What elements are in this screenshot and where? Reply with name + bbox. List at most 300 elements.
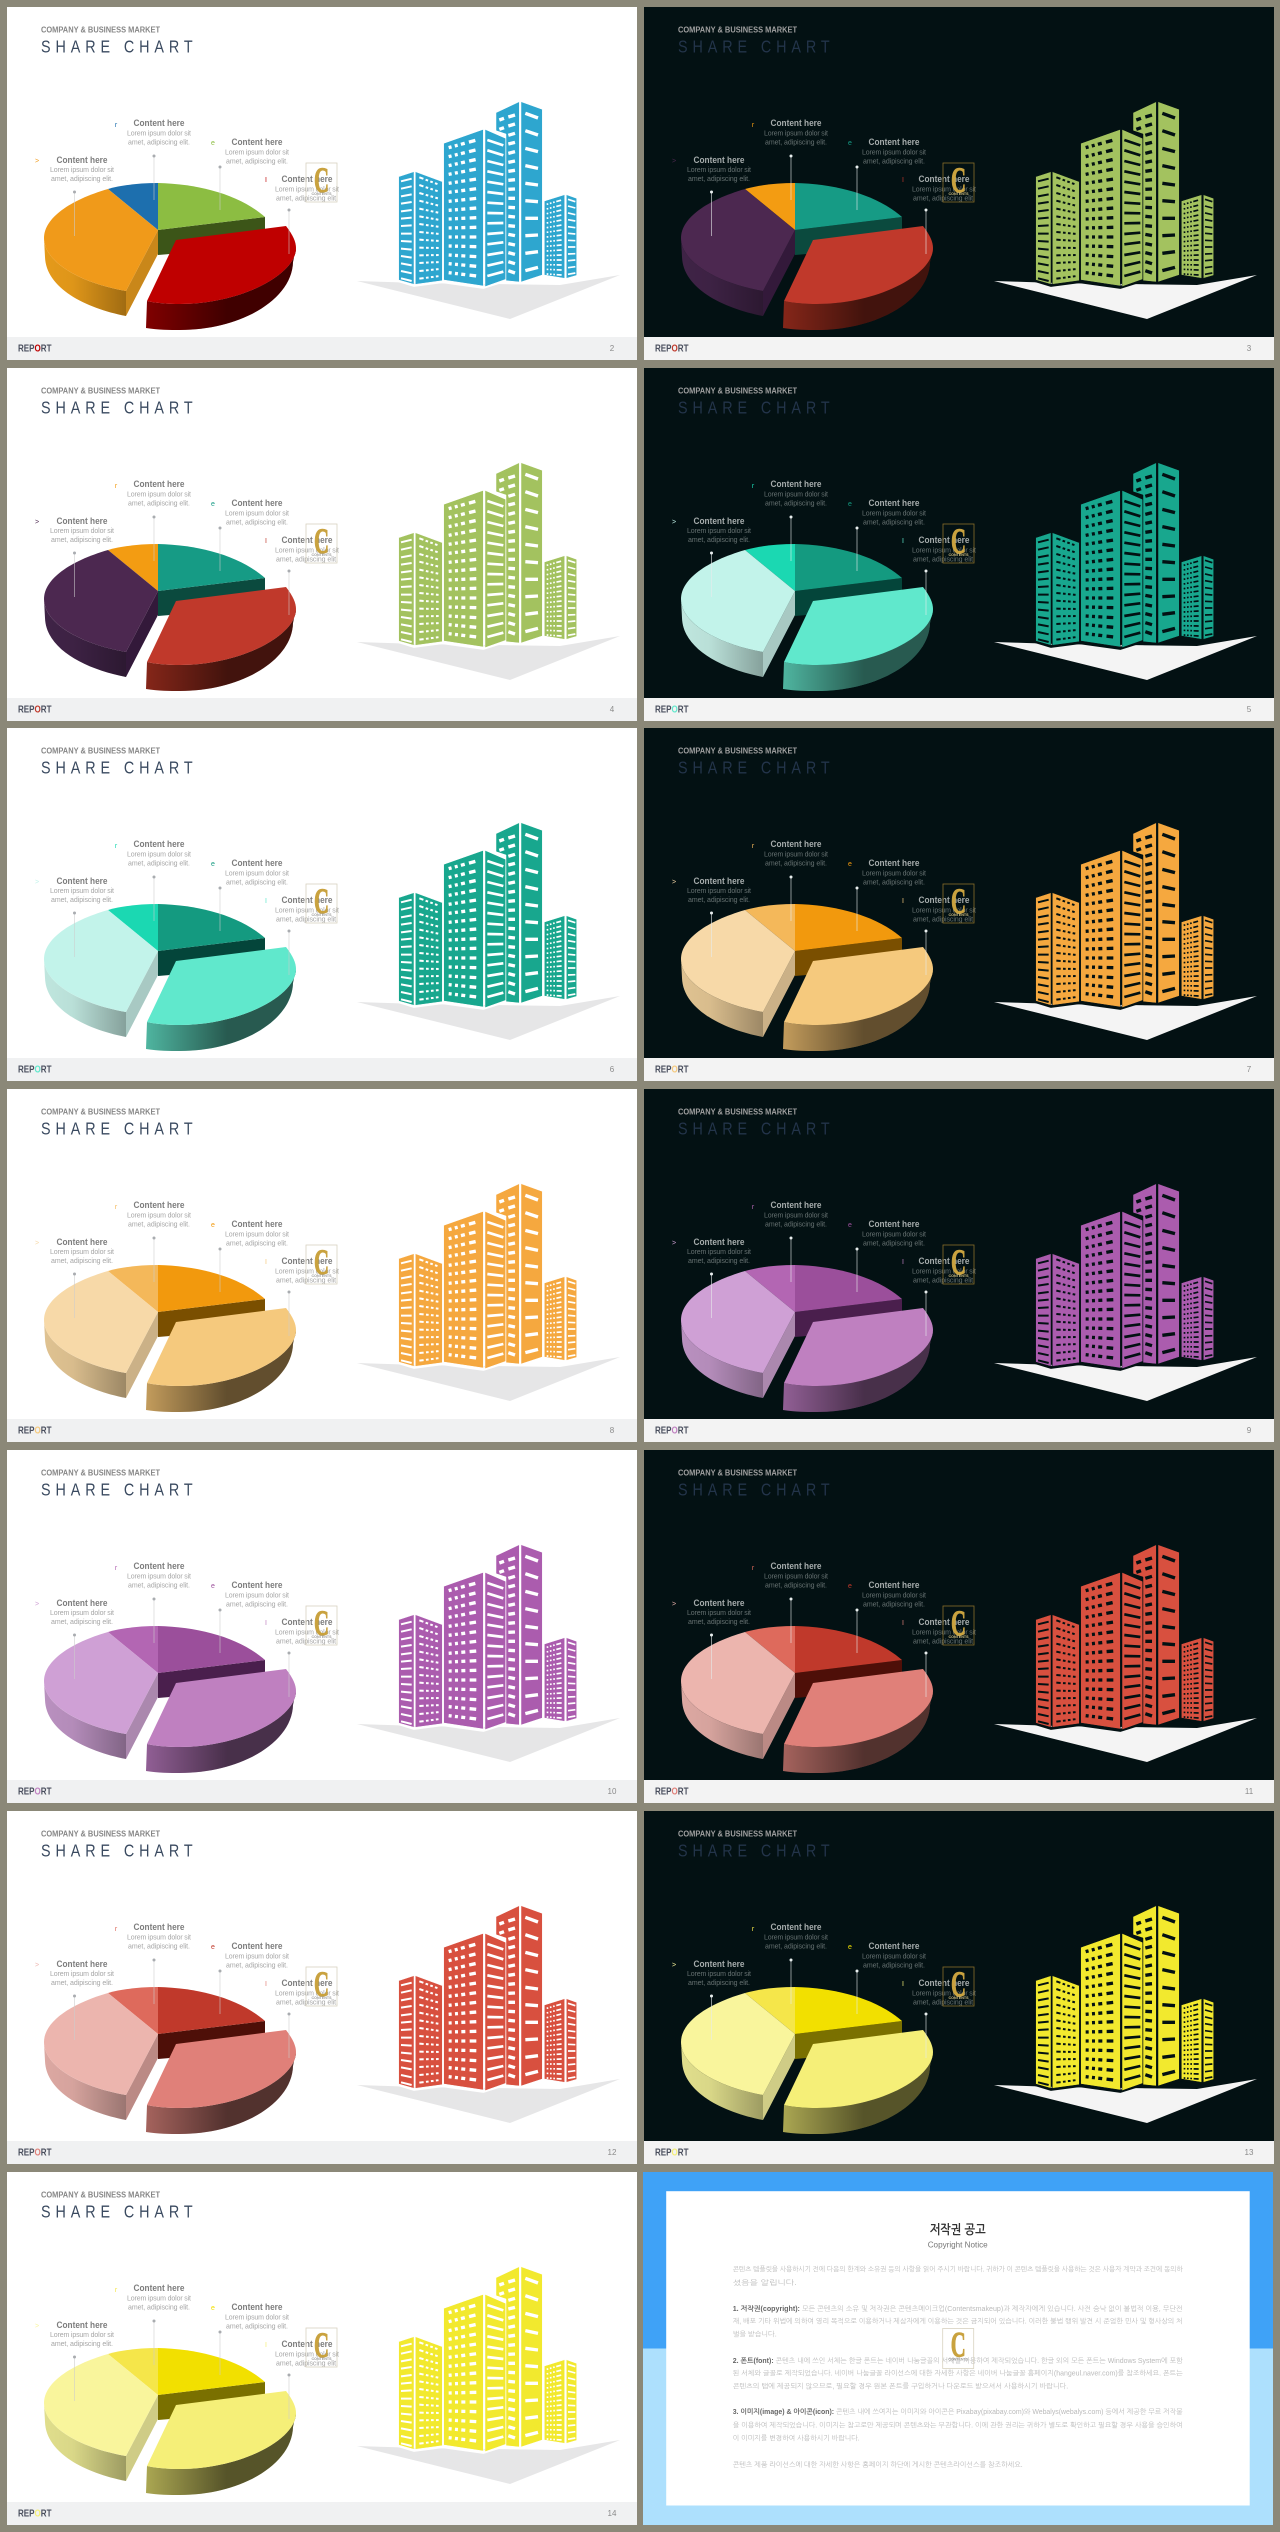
label: upper right: Lorem ipsum dolor sit [862,1232,926,1239]
label: left: Content here [693,876,744,887]
label: upper right: Content here [232,1941,282,1952]
label: upper right [848,1941,926,1969]
label: upper right [211,1941,289,1969]
label: right [265,174,339,202]
label: upper right: amet, adipiscing elit. [226,2323,288,2330]
label: upper right: Content here [868,1941,919,1952]
3D pie chart [44,904,296,1051]
watermark [306,1964,337,2006]
footer: REPORT [655,2147,688,2158]
label: upper right: Content here [232,2302,282,2312]
label: upper right: e [848,861,852,868]
label: left: Lorem ipsum dolor sit [50,1249,114,1256]
footer: 4 [610,705,615,714]
label: right: Content here [282,1256,332,1267]
label: left: amet, adipiscing elit. [51,897,113,904]
building shadow [994,2079,1257,2123]
watermark [306,2324,337,2366]
label: left: amet, adipiscing elit. [51,1258,113,1265]
label: upper right: e [211,861,215,868]
label: right: amet, adipiscing elit. [276,1999,338,2006]
label: left: Lorem ipsum dolor sit [50,167,114,174]
watermark: C [951,881,966,921]
heading: COMPANY & BUSINESS MARKET [678,386,797,395]
label: upper right: amet, adipiscing elit. [226,519,288,526]
footer: REPORT [655,1426,688,1437]
footer [7,2141,637,2164]
label: top: r [115,2286,118,2294]
label: left [672,1959,751,1987]
label: right [265,1256,339,1285]
label: top: amet, adipiscing elit. [128,1582,190,1589]
heading [41,386,193,418]
label: right: Content here [918,1256,969,1267]
label: upper right [848,858,926,887]
label: left: Content here [693,1237,744,1248]
label: left: amet, adipiscing elit. [688,176,750,183]
label: right: amet, adipiscing elit. [276,1278,338,1285]
label: right: Content here [282,1617,332,1628]
footer [644,1780,1274,1803]
label: upper right: Lorem ipsum dolor sit [225,1592,289,1599]
leader lines [73,154,290,254]
3D pie chart [681,1626,933,1773]
label: top: Content here [134,118,184,129]
footer: 6 [610,1065,615,1074]
notice body text [733,2265,1183,2468]
heading: SHARE CHART [678,1121,830,1139]
label: upper right: amet, adipiscing elit. [226,1962,288,1969]
label: right: Lorem ipsum dolor sit [912,1269,976,1276]
footer: 2 [610,344,615,353]
panel: slide 3 [644,7,1274,360]
label: left: Lorem ipsum dolor sit [687,1971,751,1978]
label: right: Content here [282,535,332,546]
label: right: Content here [282,174,332,185]
label: right: amet, adipiscing elit. [276,1638,338,1645]
label: top: Content here [134,2282,184,2294]
label: right: Content here [918,1617,969,1628]
label: right: amet, adipiscing elit. [913,1999,975,2006]
watermark: CONTENTS [312,552,332,557]
building shadow [357,2440,620,2484]
icon: city buildings [399,1545,577,1730]
footer: REPORT [655,704,688,715]
footer: REPORT [18,704,52,715]
label: left [35,1598,114,1626]
label: right: Lorem ipsum dolor sit [275,547,339,554]
label: right: amet, adipiscing elit. [913,1278,975,1285]
3D pie chart [681,544,933,691]
label: upper right: Content here [232,858,282,869]
label: right: amet, adipiscing elit. [276,2360,338,2367]
building shadow [357,1718,620,1762]
footer: 14 [608,2508,617,2518]
label: top [752,1561,828,1589]
label: top: Content here [770,118,821,129]
label: right [902,1256,976,1285]
leader lines [710,515,927,615]
label: upper right: amet, adipiscing elit. [863,1601,925,1608]
watermark: C [314,2324,329,2364]
label: top: Lorem ipsum dolor sit [127,1573,191,1580]
label: top: amet, adipiscing elit. [765,140,827,146]
label: right: Lorem ipsum dolor sit [275,2351,339,2358]
3D pie chart [681,1987,933,2134]
label: top: r [752,1565,755,1572]
label: upper right: amet, adipiscing elit. [863,1962,925,1969]
label: top: amet, adipiscing elit. [128,861,190,868]
label: right: amet, adipiscing elit. [913,1638,975,1645]
watermark: C [951,1964,966,2004]
label: top: Lorem ipsum dolor sit [764,130,828,138]
notice body text: 2. 폰트(font): 콘텐츠 내에 쓰인 서체는 한글 폰트는 네이버 나눔글꼴의 서체를 사용하여 제작되었습니다. 한글 외의 모든 폰트는 Windows System에 포함 [733,2356,1183,2364]
footer [644,2141,1274,2164]
label: right: I [902,1981,904,1988]
icon: city buildings [399,1905,577,2091]
heading: SHARE CHART [41,399,193,418]
label: right: amet, adipiscing elit. [276,196,338,202]
label: top: r [752,122,755,129]
watermark: CONTENTS [312,1634,332,1639]
label: right [902,895,976,924]
label: upper right [211,2302,289,2330]
label: upper right: Lorem ipsum dolor sit [225,150,289,156]
label: upper right: e [848,501,852,508]
label: left: Content here [56,1237,108,1248]
label: upper right: e [211,1944,215,1951]
building shadow [994,996,1257,1040]
label: right: Content here [918,174,969,185]
heading [678,1468,830,1500]
label: right: Lorem ipsum dolor sit [275,1629,339,1636]
heading [41,1829,193,1861]
label: upper right: e [211,1583,215,1590]
label: upper right: e [848,1583,852,1590]
label: upper right [211,1219,289,1248]
label: top: amet, adipiscing elit. [128,500,190,507]
notice body text: 된 서체와 글꼴로 제작되었습니다. 네이버 나눔글꼴 라이선스에 대한 자세한 사항은 네이버 나눔글꼴 홈페이지(hangeul.naver.com)를 참조하세요. 폰트는 [733,2369,1183,2377]
footer [7,1419,637,1442]
label: left: Content here [56,2320,108,2330]
label: left: Content here [693,1959,744,1970]
label: top: r [752,843,755,850]
label: top: Lorem ipsum dolor sit [127,852,191,859]
leader lines [710,154,927,254]
footer [644,1058,1274,1081]
label: top [752,839,828,868]
notice title: Copyright Notice [928,2239,988,2249]
label: left [35,1959,114,1987]
watermark [943,1242,974,1284]
footer: REPORT [18,1065,52,1076]
label: right [265,2338,339,2367]
building shadow [994,636,1257,680]
watermark: CONTENTS [312,1995,332,2000]
heading [41,1468,193,1500]
label: top: Content here [134,1561,184,1572]
label: left [35,516,114,544]
footer: 7 [1246,1065,1251,1074]
label: left: > [672,1240,676,1247]
heading [678,1108,830,1139]
label: left: Lorem ipsum dolor sit [687,1610,751,1617]
watermark: C [314,881,329,921]
heading: SHARE CHART [41,1121,193,1139]
watermark [306,1603,337,1645]
footer: REPORT [18,344,52,355]
label: upper right: Lorem ipsum dolor sit [225,510,289,517]
label: top [752,479,828,507]
label: top: amet, adipiscing elit. [765,861,827,868]
building shadow [357,2079,620,2123]
label: right: amet, adipiscing elit. [276,917,338,924]
label: left: Content here [56,516,108,527]
label: right: Content here [918,535,969,546]
label: upper right: e [211,140,215,147]
label: right [902,535,976,563]
label: right: Content here [918,895,969,906]
notice body text: 콘텐츠의 탭에 제공되지 않으므로, 필요할 경우 원본 폰트를 구입하거나 다운로드 받으셔서 사용하시기 바랍니다. [733,2382,1069,2390]
label: right: Lorem ipsum dolor sit [275,186,339,194]
label: left: Lorem ipsum dolor sit [50,888,114,895]
notice title: 저작권 공고 [930,2222,986,2236]
watermark [943,1603,974,1645]
heading [41,747,193,778]
label: top: amet, adipiscing elit. [765,1943,827,1950]
label: upper right: e [848,1944,852,1951]
label: upper right: e [211,2304,215,2312]
label: upper right: Lorem ipsum dolor sit [225,1232,289,1239]
footer: 9 [1246,1426,1251,1435]
label: top: r [115,843,118,850]
label: upper right [211,498,289,526]
label: left: amet, adipiscing elit. [51,1980,113,1987]
panel: slide 11 [644,1450,1274,1803]
label: left: Lorem ipsum dolor sit [50,1971,114,1978]
label: top: Lorem ipsum dolor sit [127,130,191,138]
footer [644,1419,1274,1442]
label: top: Lorem ipsum dolor sit [764,1934,828,1941]
label: right: Lorem ipsum dolor sit [912,908,976,915]
label: upper right: Lorem ipsum dolor sit [862,150,926,156]
label: upper right: Content here [868,1219,919,1230]
label: left [35,876,114,904]
label: left [35,1237,114,1265]
label: top: Content here [770,1922,821,1933]
label: right: Content here [282,1978,332,1989]
label: left: Content here [56,876,108,887]
label: right: Content here [918,1978,969,1989]
heading: SHARE CHART [678,1481,830,1500]
label: upper right: Lorem ipsum dolor sit [862,1953,926,1960]
heading: COMPANY & BUSINESS MARKET [41,1108,160,1117]
label: right: Lorem ipsum dolor sit [275,1990,339,1997]
label: left: Lorem ipsum dolor sit [687,888,751,895]
notice body text: 콘텐츠 제품 라이선스에 대한 자세한 사항은 홈페이지 하단에 게시한 콘텐츠라이선스를 참조하세요. [733,2460,1023,2468]
label: right: I [265,538,267,545]
footer [644,698,1274,721]
label: left: amet, adipiscing elit. [688,1619,750,1626]
label: top: r [752,1926,755,1933]
icon: city buildings [1035,1905,1213,2091]
label: right [265,1978,339,2006]
label: upper right [848,498,926,526]
label: left: Lorem ipsum dolor sit [687,167,751,174]
icon: city buildings [399,1184,577,1369]
label: left: > [35,1962,39,1969]
watermark: CONTENTS [312,191,332,196]
label: right: amet, adipiscing elit. [913,196,975,202]
leader lines [710,1597,927,1697]
label: left: Content here [56,1598,108,1609]
footer: 13 [1244,2148,1254,2157]
panel: slide 5 [644,368,1274,721]
label: top: Lorem ipsum dolor sit [127,491,191,498]
label: right: I [265,177,267,184]
label: upper right: Content here [232,1219,282,1230]
watermark: C [314,1242,329,1282]
watermark: C [951,1242,966,1282]
footer: REPORT [655,344,688,355]
notice body text: 3. 이미지(image) & 아이콘(icon): 콘텐츠 내에 쓰여지는 이미지와 아이콘은 Pixabay(pixabay.com)와 Webalys(webalys.com) 등에서 제공한 무료 저작물 [733,2408,1183,2416]
leader lines [710,876,927,975]
label: right: Lorem ipsum dolor sit [275,1269,339,1276]
label: right: I [902,538,904,545]
notice body text: 셨음을 알립니다. [733,2278,797,2286]
label: top [752,1200,828,1229]
label: left [35,2320,114,2348]
3D pie chart [681,183,933,330]
label: left: > [35,519,39,526]
leader lines [73,876,290,975]
heading [41,26,193,57]
label: left: Lorem ipsum dolor sit [50,2332,114,2338]
icon: city buildings [399,2266,577,2452]
heading: SHARE CHART [678,38,830,57]
heading [678,386,830,418]
label: upper right: amet, adipiscing elit. [226,1601,288,1608]
heading: SHARE CHART [41,2203,193,2222]
heading: COMPANY & BUSINESS MARKET [41,2190,160,2199]
label: left: > [35,1601,39,1608]
leader lines [73,1958,290,2058]
panel: copyright notice [643,2172,1273,2525]
label: left: Lorem ipsum dolor sit [50,528,114,535]
panel: slide 4 [7,368,637,721]
panel: slide 8 [7,1089,637,1442]
footer: REPORT [655,1787,688,1798]
footer: REPORT [18,2147,52,2158]
label: left: amet, adipiscing elit. [51,176,113,183]
label: left [672,876,751,904]
label: left: amet, adipiscing elit. [51,537,113,544]
watermark [306,1242,337,1284]
3D pie chart [44,1265,296,1412]
label: top: Lorem ipsum dolor sit [127,2295,191,2302]
panel: slide 12 [7,1811,637,2164]
label: top [115,839,191,868]
label: left: Content here [693,516,744,527]
label: top [115,2282,191,2311]
leader lines [73,1597,290,1697]
label: left: > [672,158,676,165]
label: upper right: e [848,140,852,147]
label: left: amet, adipiscing elit. [688,1980,750,1987]
building shadow [994,1357,1257,1401]
label: right: I [902,1259,904,1266]
label: right: amet, adipiscing elit. [913,556,975,563]
heading: COMPANY & BUSINESS MARKET [41,386,160,395]
label: upper right: Lorem ipsum dolor sit [225,1953,289,1960]
watermark: CONTENTS [948,552,968,557]
label: upper right: Content here [868,498,919,509]
notice body text: 1. 저작권(copyright): 모든 콘텐츠의 소유 및 저작권은 콘텐츠메이크업(Contentsmakeup)과 제작자에게 있습니다. 사전 승낙 없이 불법적 이용, 무단전 [733,2303,1183,2312]
label: upper right: amet, adipiscing elit. [226,158,288,166]
footer: 3 [1246,344,1251,353]
label: left: amet, adipiscing elit. [688,897,750,904]
label: top: Lorem ipsum dolor sit [764,1573,828,1580]
label: top: Content here [770,839,821,850]
icon: city buildings [1035,102,1213,287]
heading: COMPANY & BUSINESS MARKET [678,1108,797,1117]
3D pie chart [44,1626,296,1773]
label: right: Lorem ipsum dolor sit [912,1629,976,1636]
3D pie chart [44,1987,296,2134]
icon: city buildings [1035,1545,1213,1730]
label: left [672,516,751,544]
label: left: amet, adipiscing elit. [51,2340,113,2348]
label: right: Content here [282,2338,332,2350]
label: right: amet, adipiscing elit. [913,917,975,924]
label: top: Content here [770,479,821,490]
label: right [902,174,976,202]
label: upper right: amet, adipiscing elit. [226,880,288,887]
label: top: amet, adipiscing elit. [765,1222,827,1229]
footer [7,2502,637,2524]
label: left: Content here [693,155,744,166]
icon: city buildings [399,462,577,648]
watermark [943,160,974,202]
panel: slide 14 [7,2172,637,2525]
label: top: Lorem ipsum dolor sit [127,1934,191,1941]
heading: COMPANY & BUSINESS MARKET [41,1829,160,1838]
label: upper right: amet, adipiscing elit. [226,1241,288,1248]
label: top [115,1200,191,1229]
label: right: Lorem ipsum dolor sit [912,547,976,554]
label: left: Content here [693,1598,744,1609]
label: upper right: amet, adipiscing elit. [863,880,925,887]
label: upper right: Lorem ipsum dolor sit [862,1592,926,1599]
label: upper right: Content here [232,137,282,148]
heading [41,2190,193,2222]
panel: slide 2 [7,7,637,360]
label: left: Content here [56,1959,108,1970]
label: upper right: Content here [232,498,282,509]
label: top: amet, adipiscing elit. [765,1582,827,1589]
footer: REPORT [18,1426,52,1437]
label: top [115,479,191,507]
label: left: Lorem ipsum dolor sit [50,1610,114,1617]
watermark [943,521,974,563]
footer: 10 [608,1787,617,1796]
label: left: > [672,1962,676,1969]
watermark [943,2324,974,2368]
icon: city buildings [399,823,577,1009]
watermark: CONTENTS [948,912,968,917]
label: right [902,1978,976,2006]
building shadow [994,275,1257,319]
